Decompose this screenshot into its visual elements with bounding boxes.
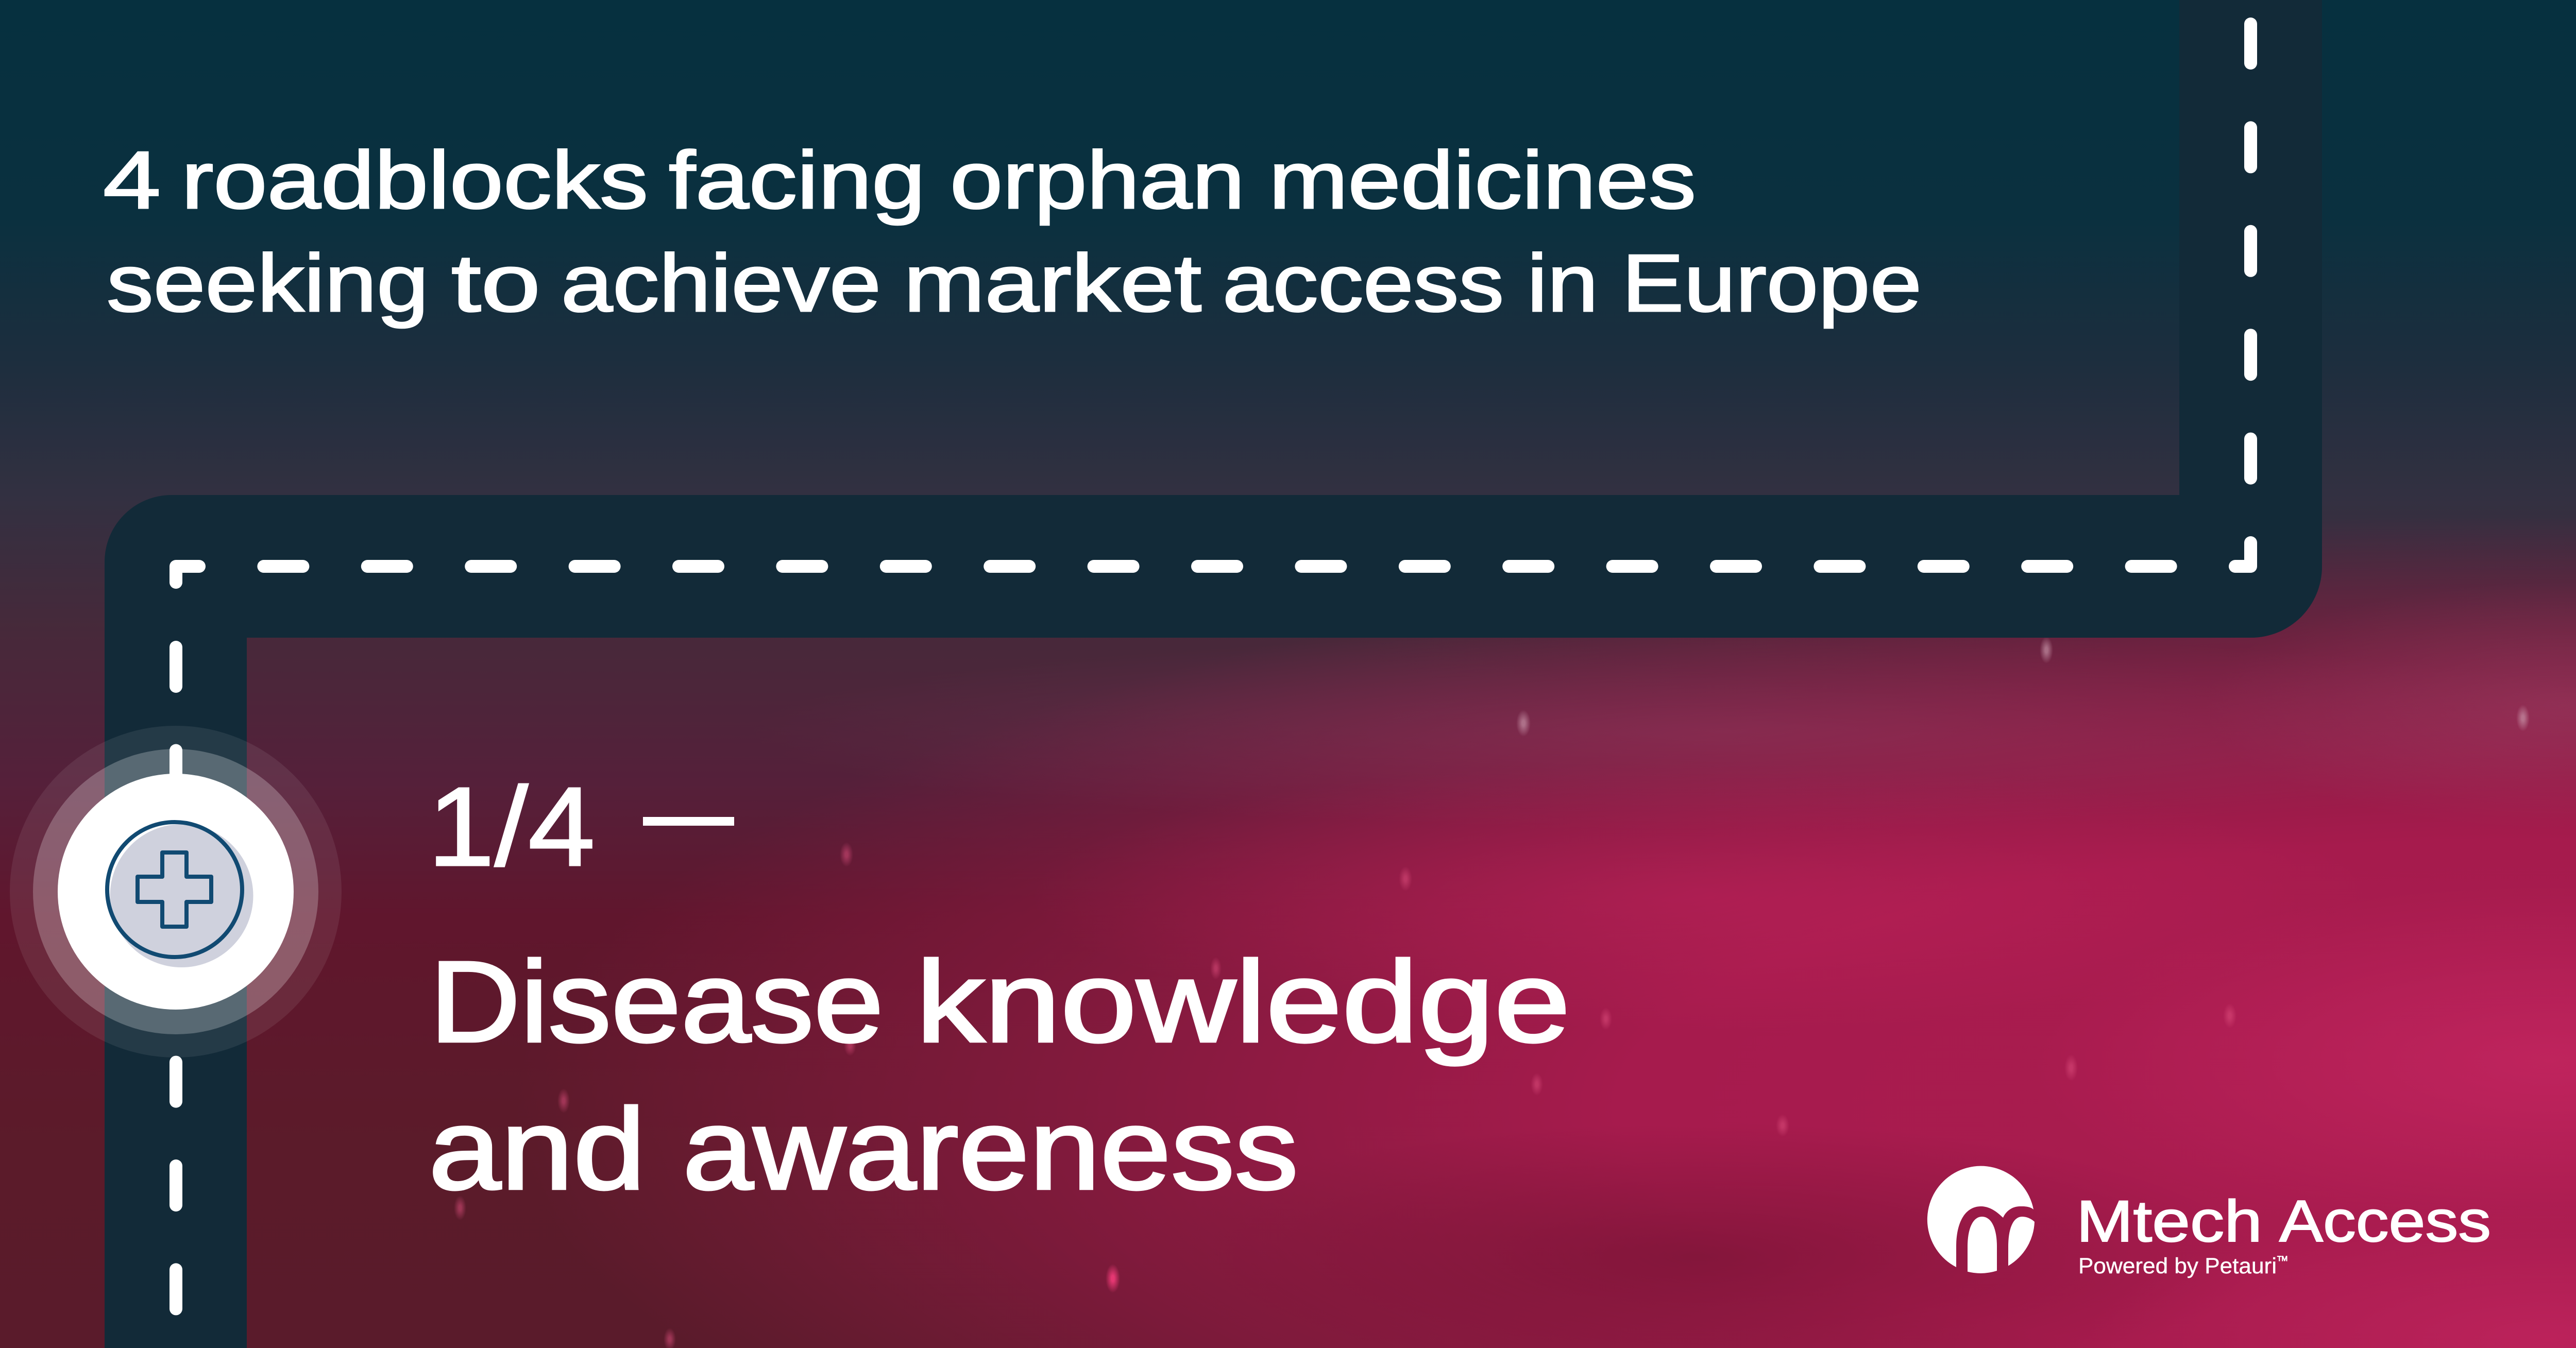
roadblock heading: knowledge: [916, 937, 1570, 1066]
title: facing: [669, 135, 925, 226]
title: roadblocks: [181, 135, 648, 226]
title: medicines: [1269, 135, 1696, 226]
logo wordmark: [2076, 1189, 2491, 1278]
title: access: [1223, 238, 1504, 329]
icon: logo mark: [1927, 1166, 2035, 1273]
step number: [428, 764, 734, 890]
roadblock heading: awareness: [683, 1085, 1298, 1214]
title: [103, 135, 1922, 329]
milestone marker: [10, 726, 342, 1057]
logo wordmark: TM: [2277, 1254, 2287, 1262]
title: market: [904, 238, 1201, 329]
roadblock heading: [429, 937, 1570, 1214]
title: 4: [103, 135, 161, 226]
title: in: [1527, 238, 1598, 329]
roadblock heading: and: [429, 1085, 646, 1214]
logo wordmark: Access: [2279, 1189, 2491, 1254]
title: achieve: [561, 238, 881, 329]
title: orphan: [950, 135, 1245, 226]
title: to: [451, 238, 540, 329]
logo wordmark: Powered by Petauri: [2078, 1254, 2277, 1278]
logo: [1927, 1166, 2491, 1278]
step number: 1/4: [428, 764, 595, 890]
logo wordmark: Mtech: [2076, 1189, 2262, 1254]
title: seeking: [107, 238, 429, 329]
roadblock heading: Disease: [430, 937, 884, 1066]
title: Europe: [1622, 238, 1922, 329]
background particles: [454, 637, 2530, 1348]
icon: medical cross: [107, 822, 253, 967]
